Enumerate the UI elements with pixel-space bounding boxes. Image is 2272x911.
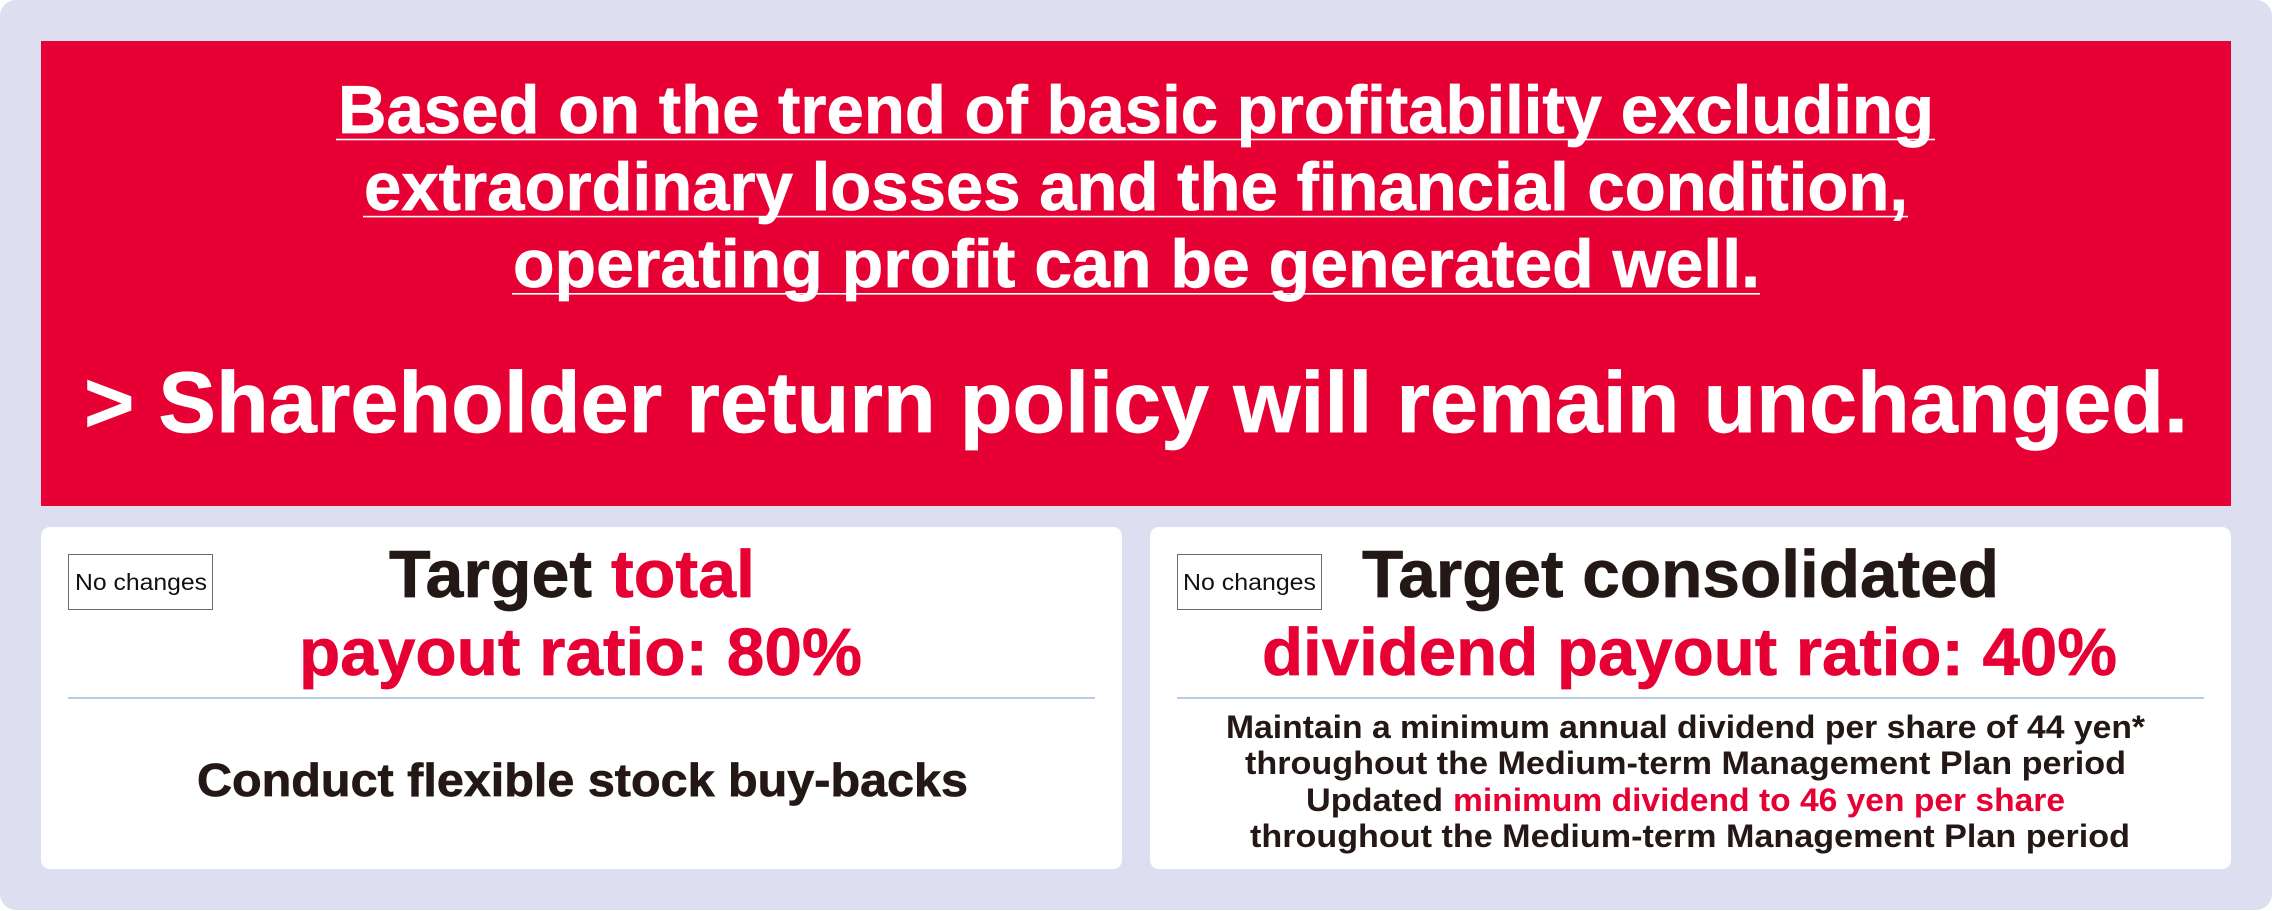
text: minimum dividend details: Maintain a minimum annual dividend per share of 44 yen* [1226,709,2146,745]
policy conclusion: > Shareholder return policy will remain unchanged. [84,355,2188,451]
heading: target consolidated: Target consolidated [1362,537,1999,612]
heading: target total: Target [389,537,592,612]
text: minimum dividend details: throughout the Medium-term Management Plan period [1245,745,2126,781]
badge: no changes [68,554,212,610]
text: minimum dividend details: minimum dividend to 46 yen per share [1453,782,2065,818]
heading: target consolidated [1262,537,2117,690]
heading: target consolidated: dividend payout ratio: 40% [1262,615,2117,690]
heading: target total: payout ratio: 80% [299,615,862,690]
text: minimum dividend details [1226,709,2146,854]
headline statement: Based on the trend of basic profitability excluding [338,72,1934,148]
badge: no changes: No changes [1183,569,1316,595]
text: minimum dividend details: throughout the Medium-term Management Plan period [1250,818,2130,854]
panel: target consolidated dividend payout ratio [1150,527,2231,869]
badge: no changes: No changes [75,569,207,595]
badge: no changes [1178,554,1322,610]
headline statement: extraordinary losses and the financial condition, [364,149,1908,225]
headline statement [336,72,1935,302]
heading: target total [299,537,862,690]
heading: target total: total [611,537,755,612]
panel: red headline [41,41,2231,506]
panel: target total payout ratio [41,527,1122,869]
headline statement: operating profit can be generated well. [513,226,1760,302]
text: stock buy-backs: Conduct flexible stock buy-backs [197,754,968,806]
text: minimum dividend details: Updated [1306,782,1443,818]
